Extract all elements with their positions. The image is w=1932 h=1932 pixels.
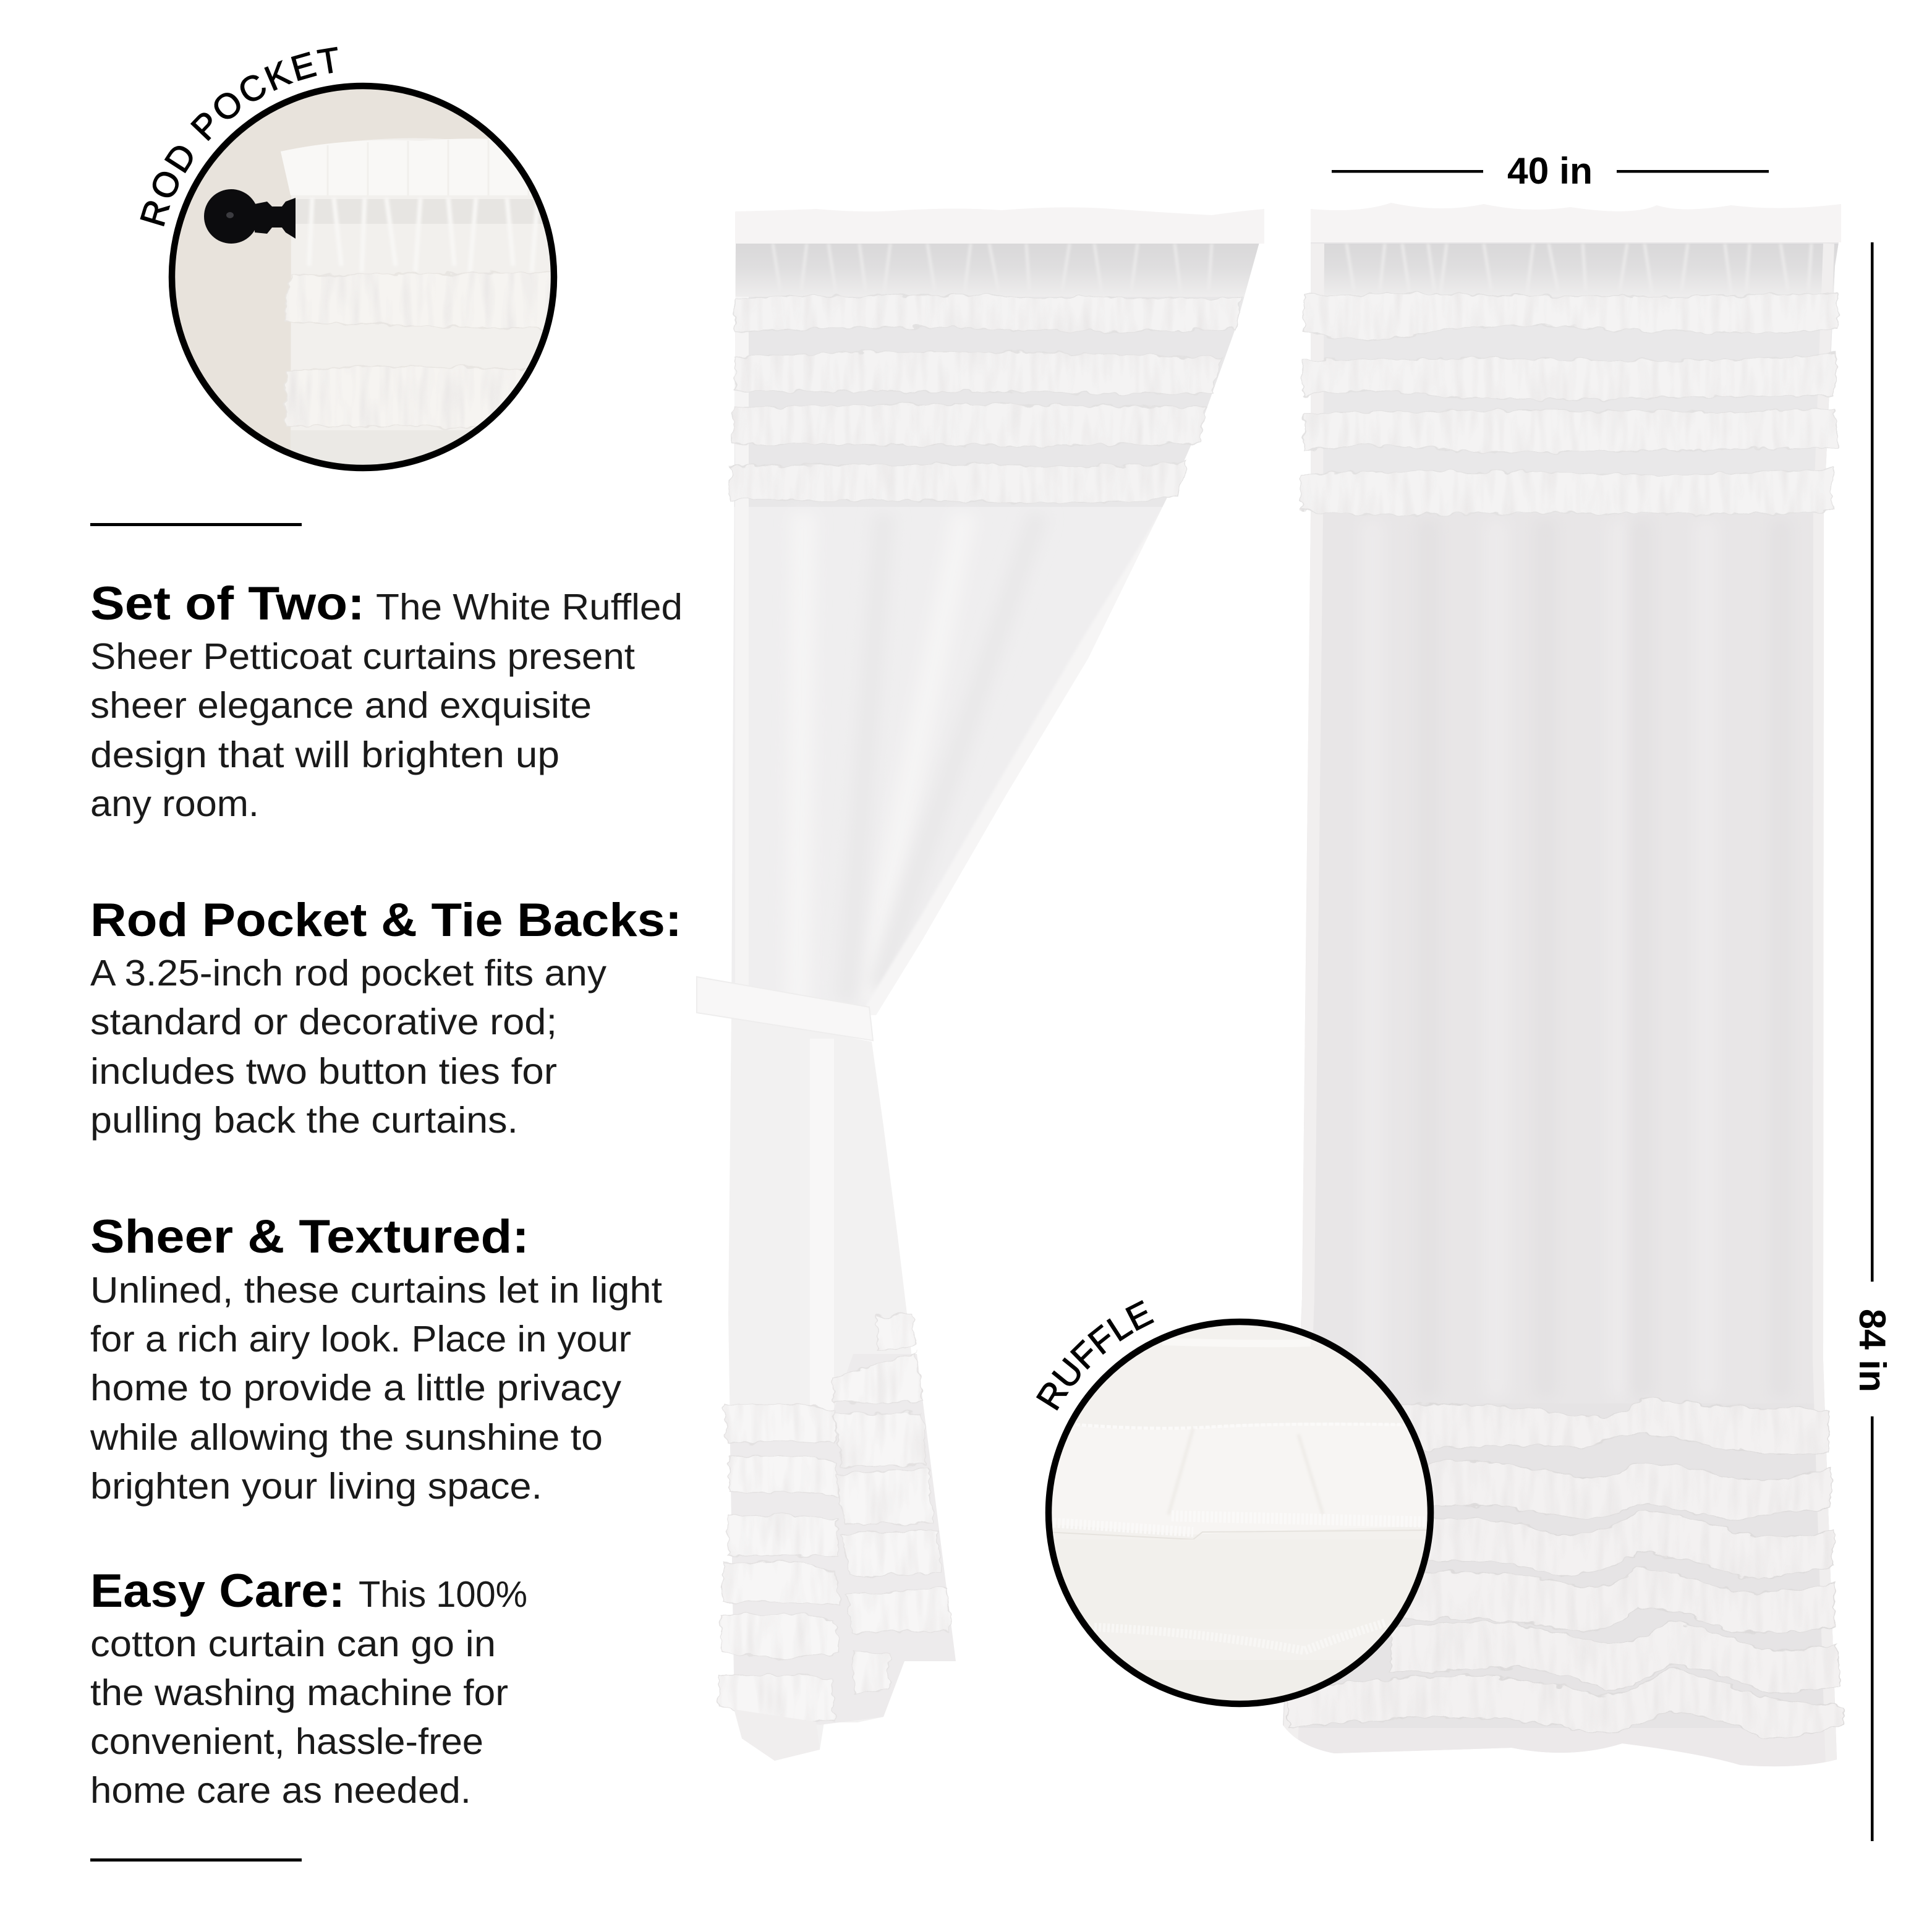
circle outline — [1049, 1322, 1431, 1704]
fabric ruffles — [284, 272, 560, 430]
panel: left curtain — [697, 207, 1264, 1761]
bottom divider — [90, 1858, 302, 1862]
text block: sheer and textured: for a rich airy look. Place in your — [90, 1319, 631, 1360]
top ruffles — [1301, 293, 1837, 515]
finial ball — [204, 189, 258, 244]
curved label: ROD POCKET — [140, 47, 338, 226]
ruffle photo — [1045, 1319, 1434, 1709]
upper drape tints and folds — [733, 244, 1264, 1020]
text block: rod pocket and tie backs — [90, 894, 682, 1141]
text block: rod pocket and tie backs: A 3.25-inch rod pocket fits any — [90, 953, 607, 994]
text block: rod pocket and tie backs: Rod Pocket & Tie Backs: — [90, 894, 682, 947]
circle outline — [172, 86, 554, 468]
text block: sheer and textured: home to provide a little privacy — [90, 1368, 622, 1408]
sheer panel tints — [1274, 244, 1849, 1771]
top ruffles — [730, 295, 1241, 503]
text block: easy care: cotton curtain can go in — [90, 1623, 496, 1664]
lower ruffles — [718, 1314, 951, 1721]
text block: set of two: any room. — [90, 783, 259, 824]
tie back band — [697, 977, 873, 1040]
rod pocket photo — [175, 89, 550, 465]
curved label: RUFFLE — [1036, 1300, 1154, 1411]
top divider — [90, 523, 302, 526]
panel: right curtain — [1274, 203, 1849, 1771]
side hem strips — [1290, 244, 1317, 1768]
text block: set of two: Set of Two: — [90, 577, 365, 630]
width dimension: 40 in: 40 in — [1507, 150, 1593, 192]
rod pocket header — [1311, 203, 1841, 242]
lower sheer tint — [730, 1354, 956, 1725]
text block: sheer and textured: Unlined, these curtains let in light — [90, 1270, 662, 1311]
text block: sheer and textured — [90, 1211, 662, 1507]
text block: set of two: design that will brighten up — [90, 734, 560, 775]
lower drape — [728, 1014, 956, 1761]
text block: sheer and textured: while allowing the sunshine to — [90, 1417, 603, 1458]
height dimension: 84 in: 84 in — [1852, 1309, 1893, 1392]
text block: easy care: This 100% — [359, 1574, 527, 1615]
text block: rod pocket and tie backs: includes two button ties for — [90, 1051, 557, 1092]
width dimension: 40 in — [1332, 150, 1769, 192]
text block: sheer and textured: brighten your living space. — [90, 1466, 542, 1507]
bottom ruffles — [1286, 1398, 1844, 1738]
text block: set of two — [90, 577, 683, 824]
text block: easy care — [90, 1565, 527, 1811]
text block: easy care: Easy Care: — [90, 1565, 345, 1617]
text block: rod pocket and tie backs: standard or decorative rod; — [90, 1002, 557, 1042]
text block: sheer and textured: Sheer & Textured: — [90, 1211, 529, 1263]
bottom hem — [734, 1709, 820, 1761]
text block: easy care: home care as needed. — [90, 1770, 471, 1811]
text block: easy care: convenient, hassle-free — [90, 1721, 483, 1762]
rod pocket header — [735, 207, 1264, 244]
text block: easy care: the washing machine for — [90, 1672, 508, 1713]
height dimension: 84 in — [1852, 242, 1893, 1841]
curtain fabric — [291, 138, 550, 430]
text block: set of two: The White Ruffled — [376, 587, 683, 628]
centre fold — [810, 1039, 834, 1416]
upper drape — [731, 242, 1259, 1015]
curtain body — [1283, 242, 1839, 1766]
rod pocket detail circle — [140, 47, 558, 471]
ruffle detail circle — [1036, 1300, 1434, 1708]
text block: rod pocket and tie backs: pulling back the curtains. — [90, 1100, 518, 1141]
text block: set of two: Sheer Petticoat curtains present — [90, 636, 635, 677]
text block: set of two: sheer elegance and exquisite — [90, 685, 592, 726]
